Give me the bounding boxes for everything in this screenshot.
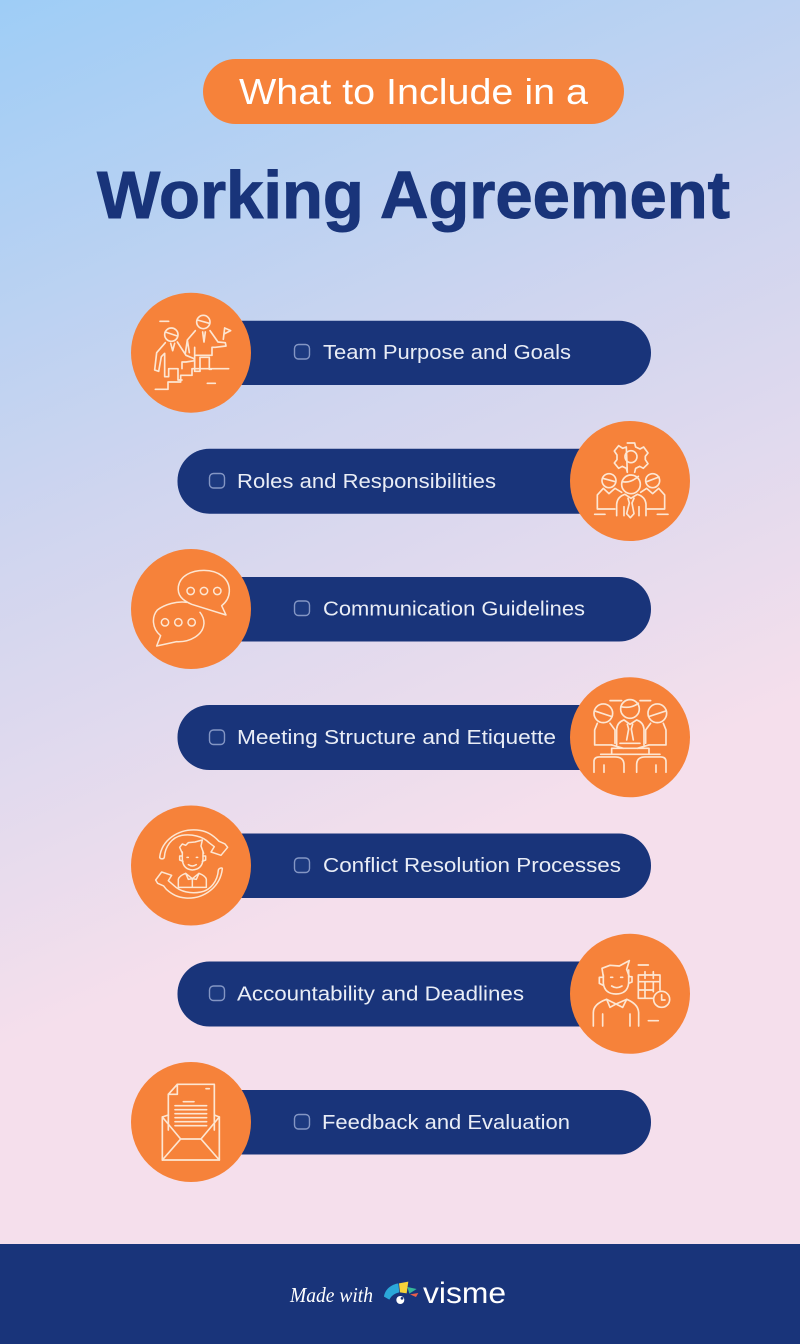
label: Meeting Structure and Etiquette — [237, 727, 556, 749]
icon circle — [131, 806, 251, 926]
label: Roles and Responsibilities — [237, 471, 496, 493]
label: Team Purpose and Goals — [323, 342, 571, 364]
item: Roles and Responsibilities — [178, 421, 690, 541]
icon circle — [570, 934, 690, 1054]
icon circle — [570, 677, 690, 797]
icon: envelope with letter — [162, 1084, 219, 1160]
pill — [190, 834, 651, 898]
item: Accountability and Deadlines — [178, 934, 690, 1054]
icon: team at a meeting table — [594, 700, 667, 772]
pill — [190, 1090, 651, 1154]
icon: person with calendar and clock — [593, 961, 670, 1026]
icon: team with gear — [595, 443, 668, 518]
checkbox — [210, 986, 224, 1000]
checkbox — [294, 858, 310, 872]
pill — [178, 705, 630, 770]
footer band — [0, 1244, 800, 1344]
icon circle — [131, 1062, 251, 1182]
checkbox — [210, 474, 224, 488]
item: Feedback and Evaluation — [131, 1062, 651, 1182]
footer — [0, 1244, 800, 1344]
checkbox — [294, 344, 310, 359]
title: Working Agreement — [97, 158, 730, 233]
label: Conflict Resolution Processes — [323, 855, 621, 877]
icon circle — [570, 421, 690, 541]
checkbox — [294, 1114, 310, 1129]
icon circle — [131, 549, 251, 669]
icon circle — [131, 293, 251, 413]
item: Communication Guidelines — [131, 549, 651, 669]
icon: person within circular arrows — [156, 830, 228, 898]
visme wordmark: visme — [423, 1277, 506, 1310]
icon: visme logo — [384, 1282, 418, 1304]
icon: chat bubbles — [153, 570, 229, 646]
checkbox — [294, 601, 310, 616]
label: Communication Guidelines — [323, 598, 585, 620]
subtitle pill: What to Include in a — [239, 71, 589, 112]
pill — [178, 962, 630, 1026]
pill — [190, 321, 651, 385]
item: Team Purpose and Goals — [131, 293, 651, 413]
label: Accountability and Deadlines — [237, 984, 524, 1006]
icon: people climbing stairs — [155, 315, 231, 389]
subtitle pill — [203, 59, 624, 124]
label: Feedback and Evaluation — [322, 1112, 570, 1134]
checkbox — [210, 730, 224, 744]
pill — [178, 449, 630, 514]
item: Meeting Structure and Etiquette — [178, 677, 690, 797]
made with label: Made with — [289, 1283, 373, 1307]
item: Conflict Resolution Processes — [131, 806, 651, 926]
pill — [190, 577, 651, 642]
